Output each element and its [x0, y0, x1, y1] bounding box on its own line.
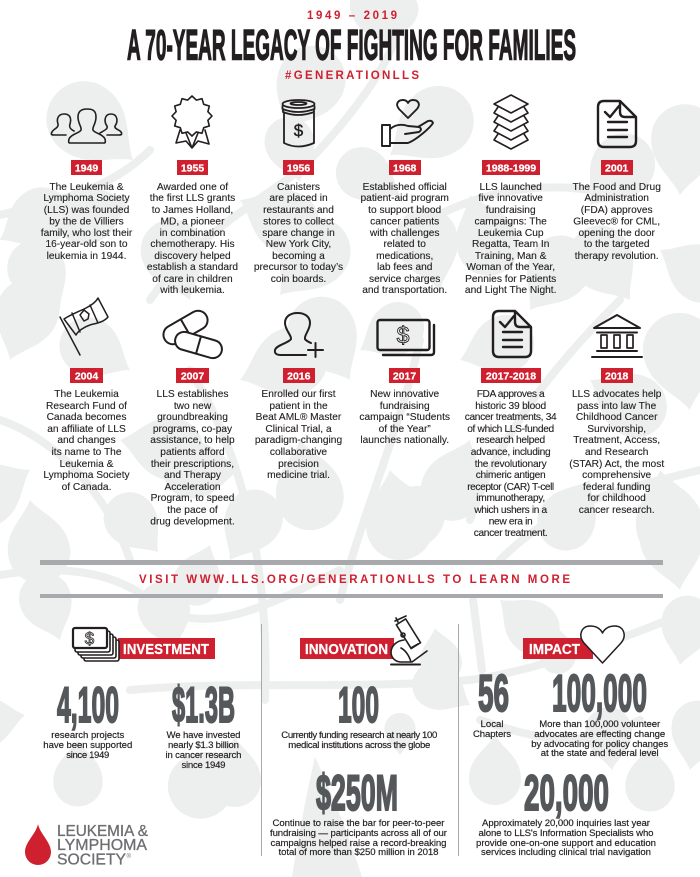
description: research helped: [476, 435, 546, 446]
panel: 2016: [255, 313, 342, 481]
stat text: local chapters: Local: [480, 719, 504, 730]
description: comprehensive: [582, 470, 652, 481]
description: FDA approves a: [477, 389, 545, 400]
panel: 2017: [359, 320, 450, 446]
description: Lymphoma Society: [43, 470, 131, 481]
description: and changes: [57, 435, 116, 446]
description: to James Holland,: [152, 205, 233, 216]
description: Canisters: [277, 182, 320, 193]
stat text: inquiries: Approximately 20,000 inquiries last year: [482, 818, 651, 829]
stat text: volunteers: at the state and federal level: [541, 748, 659, 759]
stat text: research projects: research projects: [51, 730, 125, 741]
description: becoming a: [272, 251, 325, 262]
stat text: fundraising: [270, 818, 448, 858]
description: The Food and Drug: [573, 182, 661, 193]
year tag: 2017: [393, 370, 416, 382]
year tag: 1955: [181, 162, 204, 174]
panel: 1949: [41, 109, 133, 262]
description: of Canada.: [62, 482, 111, 493]
panel: 2017-2018: [465, 311, 557, 539]
year tag: 1949: [75, 162, 98, 174]
icon: hand with heart: [382, 100, 433, 146]
description: medicine trial.: [267, 470, 330, 481]
description: (STAR) Act, the most: [569, 459, 664, 470]
description: their prescriptions,: [151, 459, 234, 470]
stat text: fundraising: Continue to raise the bar for peer-to-peer: [272, 818, 445, 829]
heading: investment: INVESTMENT: [123, 642, 209, 658]
icon: government building: [592, 315, 642, 357]
description: drug development.: [150, 516, 235, 527]
description: medications,: [376, 251, 433, 262]
logo: Leukemia & Lymphoma Society: [25, 823, 148, 868]
year tag: 2016: [287, 370, 311, 382]
description: spare change in: [262, 228, 335, 239]
year tag: 2007: [181, 370, 204, 382]
logo wordmark: LEUKEMIA &: [57, 823, 148, 840]
description: programs, co-pay: [153, 424, 233, 435]
year tag: [283, 160, 314, 175]
panel: innovation: 100: [338, 676, 379, 733]
icon: add person: [275, 313, 323, 357]
description: LLS establishes: [157, 389, 228, 400]
description: Survivorship,: [587, 424, 646, 435]
stat text: local chapters: Chapters: [473, 729, 511, 740]
panel: innovation: [270, 616, 448, 858]
panel: investment: 4,100: [57, 676, 119, 733]
year tag: 1956: [287, 162, 310, 174]
description: opening the door: [578, 228, 656, 239]
description: establish a standard: [147, 262, 238, 273]
description: to the targeted: [584, 239, 650, 250]
description: Clinical Trial, a: [265, 424, 332, 435]
description: federal funding: [583, 482, 651, 493]
description: fundraising: [380, 401, 430, 412]
description: the revolutionary: [475, 459, 548, 470]
stat text: volunteers: by advocating for policy changes: [531, 739, 668, 750]
date range: 1949 – 2019: [307, 10, 397, 22]
stat text: invested: in cancer research: [166, 750, 242, 761]
description: fundraising: [486, 205, 536, 216]
description: cancer patients: [370, 216, 439, 227]
description: therapy revolution.: [575, 251, 659, 262]
description: [43, 389, 131, 493]
description: related to: [383, 239, 426, 250]
description: chemotherapy. His: [150, 239, 235, 250]
description: with challenges: [369, 228, 440, 239]
description: groundbreaking: [157, 412, 228, 423]
description: The Leukemia: [54, 389, 119, 400]
description: Training, Man &: [475, 251, 547, 262]
description: stores to collect: [263, 216, 334, 227]
description: and transportation.: [362, 285, 447, 296]
description: the first LLS grants: [150, 193, 235, 204]
description: New York City,: [266, 239, 331, 250]
year tag: [283, 368, 315, 383]
description: [569, 389, 664, 516]
hashtag: #GENERATIONLLS: [285, 70, 419, 82]
year tag: [482, 160, 540, 175]
stat text: inquiries: provide one-on-one support and education: [476, 838, 656, 849]
icon: dollar sign: $: [294, 121, 304, 140]
description: of which LLS-funded: [467, 424, 555, 435]
description: cancer research.: [579, 505, 655, 516]
description: [150, 389, 235, 527]
year tag: 2017-2018: [486, 370, 536, 382]
stat text: invested: since 1949: [182, 760, 226, 771]
panel: 1955: [147, 96, 238, 296]
description: new era in: [489, 516, 533, 527]
stat text: invested: nearly $1.3 billion: [168, 740, 239, 751]
icon: family: [51, 109, 122, 143]
stat text: fundraising: campaigns helped raise a record-breaking: [270, 838, 446, 849]
year tag: [389, 160, 421, 175]
description: restaurants and: [263, 205, 334, 216]
year tag: [601, 368, 633, 383]
description: [147, 182, 238, 296]
icon: microscope: [391, 616, 427, 664]
description: Canada becomes: [47, 412, 126, 423]
stat text: volunteers: [531, 719, 668, 759]
description: New innovative: [370, 389, 440, 400]
description: Program, to speed: [151, 493, 235, 504]
heading: impact: IMPACT: [529, 642, 580, 658]
description: MD, a pioneer: [160, 216, 225, 227]
description: 16-year-old son to: [45, 239, 128, 250]
description: service charges: [369, 274, 440, 285]
stat text: institutions: medical institutions across the globe: [288, 740, 430, 751]
description: cancer treatment.: [474, 528, 548, 539]
description: (FDA) approves: [581, 205, 653, 216]
stat text: local chapters: [473, 719, 511, 740]
icon: Canadian flag: [60, 298, 108, 355]
stat text: inquiries: alone to LLS's Information Specialists who: [478, 828, 654, 839]
description: The Leukemia &: [49, 182, 124, 193]
description: Woman of the Year,: [466, 262, 555, 273]
year tag: [71, 160, 102, 175]
description: Treatment, Access,: [573, 435, 660, 446]
year tag: [481, 368, 541, 383]
description: and Research: [585, 447, 648, 458]
description: to support blood: [368, 205, 442, 216]
panel: 1988-1999: [465, 95, 556, 296]
description: LLS launched: [480, 182, 542, 193]
icon: heart: [581, 626, 624, 663]
year tag: [176, 368, 209, 383]
description: [41, 182, 133, 262]
description: [573, 182, 661, 262]
icon: blood drop: [25, 824, 51, 865]
stat text: invested: We have invested: [166, 730, 240, 741]
panel: 1956: [254, 100, 343, 285]
logo wordmark: LYMPHOMA: [57, 837, 147, 854]
icon: coin canister: [282, 100, 314, 146]
stat text: research projects: [43, 730, 132, 761]
description: of the Year”: [379, 424, 431, 435]
description: two new: [174, 401, 212, 412]
stat text: invested: [166, 730, 242, 771]
description: [359, 389, 450, 446]
panel: 2007: [150, 307, 235, 527]
heading: impact: [523, 638, 593, 659]
description: paradigm-changing: [255, 435, 342, 446]
description: pass into law The: [577, 401, 657, 412]
panel: 2004: [43, 298, 131, 493]
description: receptor (CAR) T-cell: [467, 482, 554, 493]
heading: innovation: INNOVATION: [305, 642, 388, 658]
description: [465, 182, 556, 296]
description: Leukemia &: [60, 459, 114, 470]
description: and Therapy: [164, 470, 222, 481]
description: patient in the: [269, 401, 328, 412]
description: by the de Villiers: [49, 216, 124, 227]
description: [361, 182, 449, 296]
description: its name to The: [51, 447, 122, 458]
description: an affiliate of LLS: [47, 424, 126, 435]
stat text: research projects: have been supported: [43, 740, 132, 751]
icon: checklist document: [493, 311, 531, 357]
description: which ushers in a: [473, 505, 548, 516]
description: Acceleration: [164, 482, 221, 493]
panel: 2001: [573, 101, 661, 262]
description: Gleevec® for CML,: [573, 216, 660, 227]
stat text: volunteers: advocates are effecting change: [534, 729, 665, 740]
icon: award ribbon: [172, 96, 212, 148]
description: cancer treatments, 34: [465, 412, 557, 423]
logo wordmark: ®: [126, 853, 132, 860]
stat text: fundraising: total of more than $250 million in 2018: [278, 847, 438, 858]
description: patients afford: [160, 447, 225, 458]
description: of care in children: [152, 274, 233, 285]
panel: 1968: [361, 100, 449, 296]
icon: layered stack: [494, 95, 528, 149]
description: campaign “Students: [359, 412, 450, 423]
description: Research Fund of: [46, 401, 127, 412]
description: and Light The Night.: [465, 285, 556, 296]
description: LLS advocates help: [572, 389, 662, 400]
description: lab fees and: [377, 262, 433, 273]
description: family, who lost their: [41, 228, 133, 239]
description: coin boards.: [271, 274, 326, 285]
description: Childhood Cancer: [576, 412, 658, 423]
icon: checklist document: [598, 101, 636, 147]
description: are placed in: [269, 193, 328, 204]
icon: banknote: [378, 320, 434, 355]
description: historic 39 blood: [475, 401, 547, 412]
icon: stack of money: $: [85, 629, 95, 648]
icon: stack of money: [73, 628, 119, 661]
stat text: research projects: since 1949: [66, 750, 109, 761]
description: Regatta, Team In: [472, 239, 549, 250]
panel: 2018: [569, 315, 664, 516]
stat text: inquiries: services including clinical trial navigation: [481, 847, 651, 858]
logo wordmark: SOCIETY: [57, 852, 126, 868]
description: in combination: [160, 228, 225, 239]
description: campaigns: The: [475, 216, 547, 227]
year tag: [177, 160, 208, 175]
year tag: 1968: [393, 162, 417, 174]
panel: impact: [473, 626, 668, 858]
year tag: 2001: [605, 162, 629, 174]
description: [465, 389, 557, 539]
stat text: fundraising: fundraising — participants across all of our: [270, 828, 448, 839]
year tag: 2018: [605, 370, 629, 382]
icon: capsules: [160, 307, 224, 360]
year tag: 1988-1999: [486, 162, 536, 174]
description: assistance, to help: [150, 435, 235, 446]
description: [254, 182, 343, 285]
description: leukemia in 1944.: [47, 251, 126, 262]
description: five innovative: [478, 193, 543, 204]
panel: investment: $1.3B: [172, 676, 235, 733]
year tag: [70, 368, 103, 383]
description: advance, including: [471, 447, 551, 458]
description: Administration: [584, 193, 649, 204]
description: Pennies for Patients: [465, 274, 556, 285]
stat text: institutions: [281, 730, 437, 751]
icon: dollar outline: $: [397, 322, 410, 348]
description: chimeric antigen: [476, 470, 546, 481]
description: precursor to today’s: [254, 262, 343, 273]
stat text: volunteers: More than 100,000 volunteer: [539, 719, 661, 730]
description: with leukemia.: [159, 285, 225, 296]
stat text: institutions: Currently funding research at nearly 100: [281, 730, 437, 741]
year tag: [601, 160, 633, 175]
year tag: 2004: [75, 370, 98, 382]
stat text: inquiries: [476, 818, 656, 858]
call to action band: [40, 560, 663, 598]
stat: 20,000: 20,000: [524, 764, 609, 821]
call to action band: VISIT WWW.LLS.ORG/GENERATIONLLS TO LEARN MORE: [139, 574, 570, 586]
description: launches nationally.: [360, 435, 449, 446]
description: [255, 389, 342, 481]
description: patient-aid program: [361, 193, 449, 204]
description: Leukemia Cup: [478, 228, 544, 239]
description: Enrolled our first: [261, 389, 336, 400]
logo wordmark: [57, 823, 148, 868]
description: discovery helped: [154, 251, 231, 262]
description: (LLS) was founded: [44, 205, 130, 216]
panel: investment: [43, 628, 242, 771]
description: Beat AML® Master: [256, 412, 342, 423]
description: Awarded one of: [157, 182, 228, 193]
description: immunotherapy,: [476, 493, 545, 504]
description: Lymphoma Society: [43, 193, 131, 204]
description: Established official: [363, 182, 447, 193]
description: collaborative: [270, 447, 327, 458]
description: the pace of: [167, 505, 218, 516]
description: for childhood: [588, 493, 646, 504]
description: precision: [278, 459, 319, 470]
stat: 56: 56: [478, 664, 509, 722]
stat: $250M: $250M: [316, 764, 398, 821]
